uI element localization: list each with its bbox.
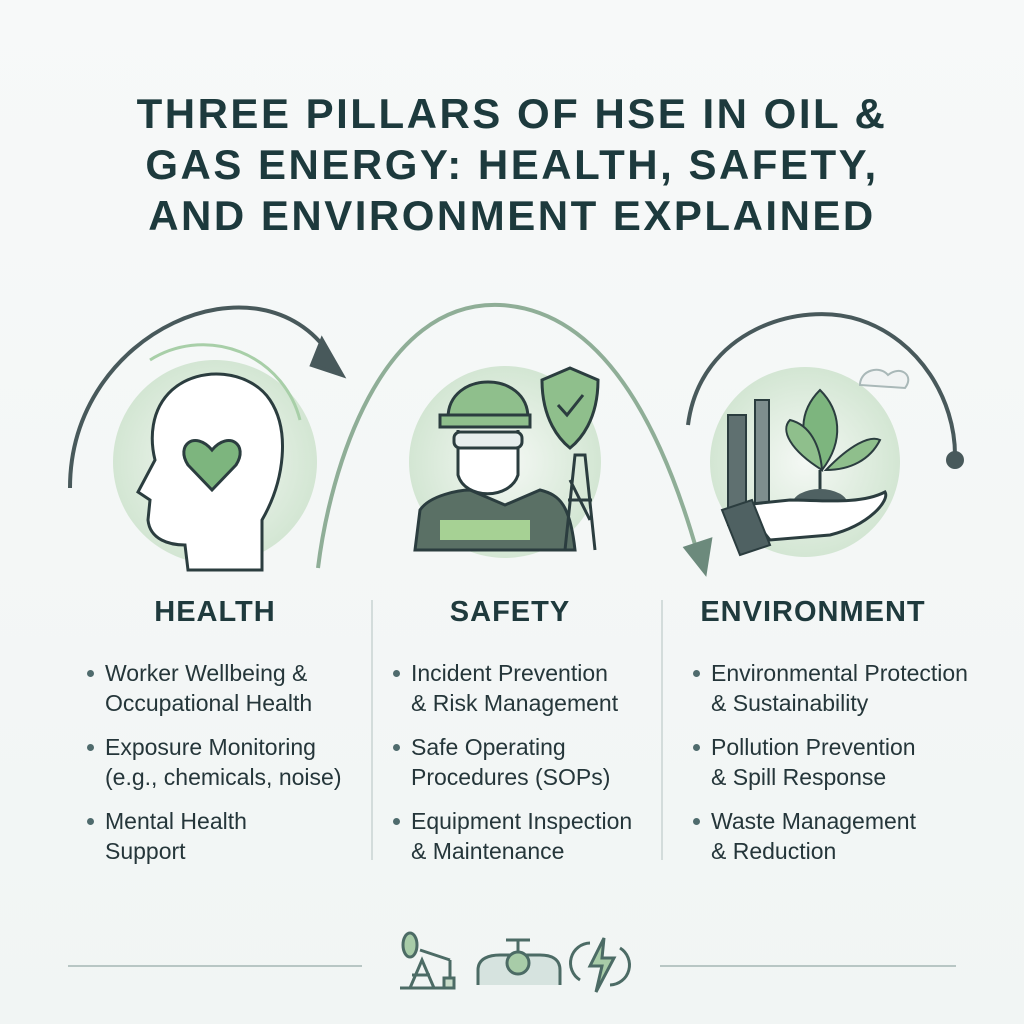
list: safety: Procedures (SOPs): [411, 764, 610, 790]
arrow: safety to environment: [318, 305, 710, 572]
list: environment: & Sustainability: [711, 690, 868, 716]
icon: pumpjack: [400, 933, 454, 988]
title: THREE PILLARS OF HSE IN OIL &: [137, 90, 887, 137]
list: health: Worker Wellbeing &: [105, 660, 307, 686]
list: health: (e.g., chemicals, noise): [105, 764, 341, 790]
title: AND ENVIRONMENT EXPLAINED: [148, 192, 876, 239]
title: GAS ENERGY: HEALTH, SAFETY,: [145, 141, 879, 188]
list: health: Mental Health: [105, 808, 247, 834]
list: environment: & Spill Response: [711, 764, 886, 790]
list: environment: Waste Management: [711, 808, 916, 834]
list: safety: [393, 660, 632, 864]
footer icons: [68, 932, 956, 993]
heading: environment: ENVIRONMENT: [700, 596, 926, 628]
icon: energy cycle: [571, 938, 629, 992]
list: environment: Pollution Prevention: [711, 734, 916, 760]
title: [137, 90, 887, 239]
icon: environment hand plant: [710, 367, 908, 557]
list: health: Support: [105, 838, 186, 864]
list: safety: Incident Prevention: [411, 660, 608, 686]
list: environment: & Reduction: [711, 838, 836, 864]
list: health: Exposure Monitoring: [105, 734, 316, 760]
list: environment: Environmental Protection: [711, 660, 968, 686]
icon: health head: [113, 345, 317, 570]
list: safety: Safe Operating: [411, 734, 566, 760]
list: environment: [693, 660, 968, 864]
heading: health: HEALTH: [154, 596, 276, 628]
heading: safety: SAFETY: [450, 596, 570, 628]
arrow: environment loop: [688, 314, 962, 467]
icon: pipe valve: [478, 940, 560, 985]
list: health: [87, 660, 341, 864]
list: health: Occupational Health: [105, 690, 312, 716]
arrow: health to safety: [70, 307, 342, 488]
icon: safety worker: [409, 366, 601, 558]
list: safety: & Risk Management: [411, 690, 618, 716]
list: safety: & Maintenance: [411, 838, 564, 864]
illustration row: [68, 302, 964, 577]
list: safety: Equipment Inspection: [411, 808, 632, 834]
